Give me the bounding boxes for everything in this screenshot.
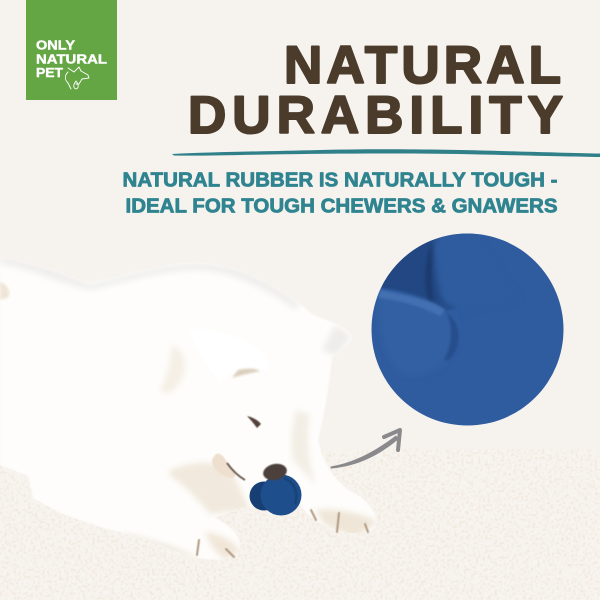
curved arrow: [331, 430, 400, 468]
dog photo: [0, 256, 378, 560]
paw claws: [197, 510, 368, 557]
brush stroke divider: [172, 149, 600, 157]
logo wordmark: PET: [36, 65, 63, 80]
subtitle: IDEAL FOR TOUGH CHEWERS & GNAWERS: [126, 194, 558, 218]
dog body: [0, 258, 376, 560]
logo wordmark: NATURAL: [36, 52, 107, 66]
subtitle: [122, 168, 558, 218]
fur shading: [0, 256, 378, 560]
rubber toy: [250, 474, 302, 516]
logo wordmark: ONLY: [36, 38, 75, 52]
dog nose: [262, 462, 288, 482]
muzzle shadow and mouth: [212, 454, 235, 478]
carpet: [0, 440, 600, 600]
logo wordmark: [36, 38, 107, 80]
ear: [190, 329, 268, 384]
subtitle: NATURAL RUBBER IS NATURALLY TOUGH -: [122, 168, 558, 192]
logo icon: pet outline: [65, 67, 89, 89]
title: [188, 36, 563, 145]
zoomed detail circle: [360, 225, 564, 426]
eye: [247, 416, 261, 428]
title: NATURAL: [284, 36, 561, 95]
title: DURABILITY: [188, 86, 563, 145]
logo badge: [26, 0, 117, 100]
